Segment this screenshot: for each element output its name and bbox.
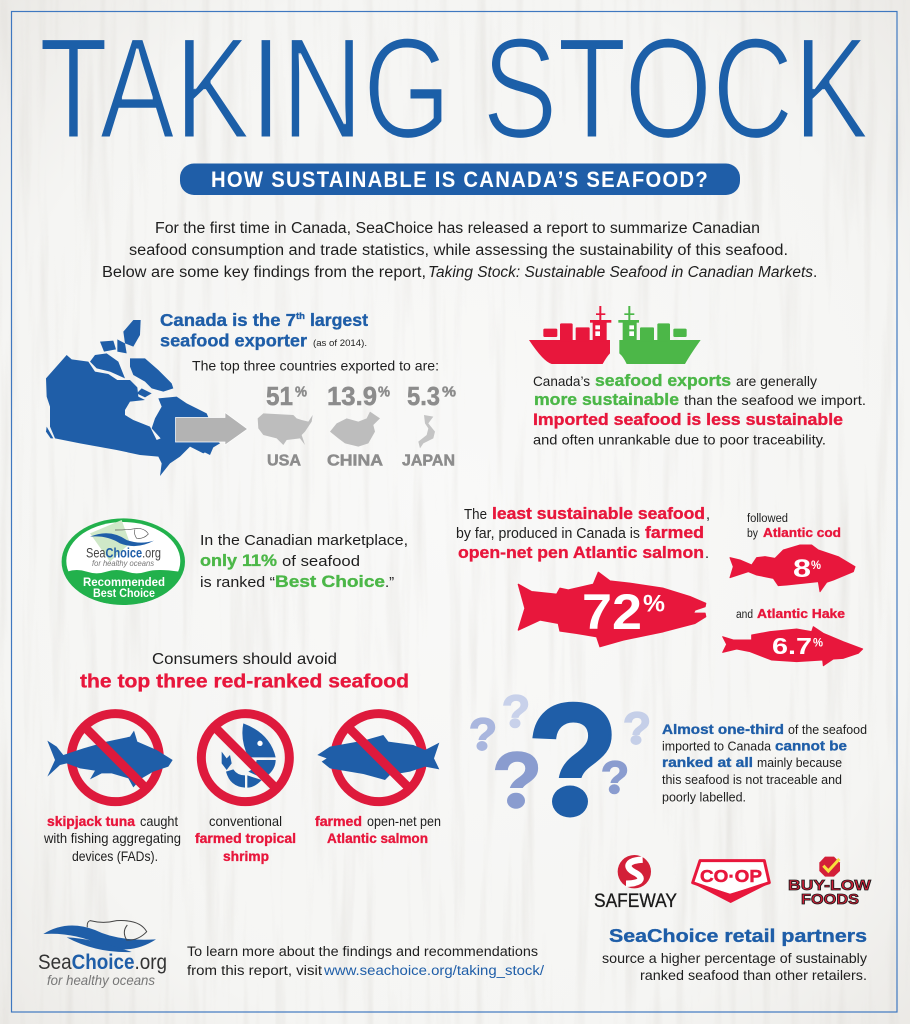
panel: avoid [43, 651, 441, 864]
stat: Japan [402, 381, 456, 470]
panel: ships [529, 306, 866, 448]
text: retail partners [602, 926, 867, 983]
intro text: For the first time in Canada, SeaChoice has released a report to summarize Canadian [155, 220, 760, 237]
text: one third [662, 721, 867, 804]
heading: exporter: largest [310, 310, 368, 330]
icon: question marks: ? [527, 670, 619, 849]
icon: no skipjack tuna [47, 714, 173, 802]
text: only 11%: of seafood [282, 553, 360, 570]
text: exports vs imports: Canada’s [533, 373, 590, 389]
icon: question marks: ? [623, 702, 651, 755]
panel: unrankable [470, 694, 866, 818]
text: followed by cod: Atlantic cod [763, 525, 841, 540]
icon: arrow [176, 412, 248, 445]
text: least sustainable: , [706, 507, 710, 523]
logo: SeaChoice: SeaChoice.org [38, 951, 167, 974]
heading: avoid: the top three red-ranked seafood [80, 672, 409, 692]
icon: cod 8% [730, 545, 855, 592]
text: only 11% [200, 532, 408, 591]
text: one third: this seafood is not traceable and [662, 773, 842, 787]
stat: Japan: 5.3 [407, 381, 440, 411]
icon: hake 6.7% [723, 627, 863, 666]
text: one third: cannot be [775, 738, 847, 754]
icon: no tropical shrimp [201, 714, 289, 802]
text: only 11%: is ranked “ [200, 574, 275, 591]
intro text: Below are some key findings from the report, [102, 264, 426, 281]
icon: no farmed salmon [317, 714, 439, 802]
intro text: Taking Stock: Sustainable Seafood in Canadian Markets [428, 264, 813, 281]
logo: Safeway: SAFEWAY [594, 891, 677, 912]
icon: hake 6.7%: 6.7 [772, 633, 812, 659]
icon: green ship [618, 306, 701, 364]
text: one third: mainly because [757, 756, 842, 770]
caption: tuna: with fishing aggregating [43, 830, 181, 846]
heading: exporter: seafood exporter [160, 330, 307, 350]
text: only 11%: .” [385, 574, 394, 591]
stat: China: % [378, 384, 390, 400]
icon: SeaChoice recommended label: for healthy oceans [92, 559, 154, 568]
text: exports vs imports: are generally [736, 373, 817, 389]
text: one third: poorly labelled. [662, 790, 746, 804]
text: one third: of the seafood [788, 723, 867, 737]
text: retail partners: ranked seafood than other retailers. [640, 967, 867, 983]
logo: Buy-Low Foods [788, 857, 872, 908]
text: only 11%: In the Canadian marketplace, [200, 532, 408, 549]
text: one third: imported to Canada [662, 740, 771, 754]
text: least sustainable: . [705, 546, 709, 562]
stat: China: CHINA [327, 452, 383, 470]
intro text [102, 220, 817, 281]
text: and hake: and [736, 609, 753, 621]
stat: China [327, 381, 390, 470]
text: least sustainable: least sustainable seafood [492, 505, 705, 523]
subtitle banner [180, 164, 740, 195]
stat: USA [258, 381, 313, 470]
text: exports vs imports: more sustainable [534, 391, 679, 409]
text: retail partners: source a higher percentage of sustainably [602, 950, 867, 966]
text: exports vs imports: than the seafood we import. [684, 392, 866, 408]
caption: tuna [43, 813, 181, 864]
icon: SeaChoice recommended label [62, 518, 185, 605]
text: least sustainable [456, 505, 710, 562]
text: one third: ranked at all [662, 754, 753, 770]
stat: Japan: JAPAN [402, 452, 455, 470]
caption: shrimp: farmed tropical [195, 830, 296, 846]
logo: Co-op [693, 861, 769, 902]
caption: salmon: farmed [315, 813, 362, 829]
panel: retail partners [594, 855, 872, 983]
icon: cod 8%: % [811, 558, 821, 572]
icon: question marks: ? [601, 751, 629, 804]
text: least sustainable: open-net pen Atlantic salmon [458, 544, 704, 562]
icon: SeaChoice recommended label: Best Choice [93, 588, 155, 600]
logo: SeaChoice: for healthy oceans [47, 972, 155, 988]
caption: salmon: open-net pen [367, 813, 441, 829]
text: followed by cod: followed [747, 513, 788, 525]
text: and hake: Atlantic Hake [757, 606, 845, 621]
caption: shrimp: conventional [209, 813, 282, 829]
stat: USA: USA [267, 452, 301, 470]
subtitle banner: HOW SUSTAINABLE IS CANADA’S SEAFOOD? [211, 168, 708, 192]
text: retail partners: SeaChoice retail partners [609, 926, 867, 946]
icon: Canada map [46, 320, 223, 476]
icon: salmon 72%: % [643, 590, 665, 618]
caption: salmon: Atlantic salmon [327, 830, 428, 846]
caption: tuna: devices (FADs). [72, 848, 158, 864]
icon: cod 8%: 8 [793, 555, 811, 583]
footer text: www.seachoice.org/taking_stock/ [323, 963, 544, 978]
text: only 11%: only 11% [200, 552, 277, 570]
icon: question marks: ? [469, 708, 497, 761]
panel: exporter [46, 310, 456, 476]
stat: Japan: % [442, 384, 456, 400]
text: least sustainable: farmed [645, 524, 704, 542]
text: exports vs imports [533, 372, 866, 448]
stat: USA: % [295, 384, 307, 400]
stat: China: 13.9 [327, 381, 377, 411]
icon: salmon 72% [518, 572, 706, 647]
icon: question marks: ? [502, 685, 530, 738]
logo: SeaChoice [38, 921, 167, 988]
logo: Buy-Low Foods: FOODS [801, 891, 859, 908]
caption: tuna: caught [140, 813, 178, 829]
heading: exporter: Canada is the 7 [160, 310, 296, 330]
icon: SeaChoice recommended label: SeaChoice.org [86, 544, 161, 560]
heading: avoid: Consumers should avoid [152, 651, 337, 668]
text: exports vs imports: seafood exports [595, 372, 731, 390]
text: followed by cod [747, 513, 841, 540]
icon: question marks [470, 694, 650, 818]
text: only 11%: Best Choice [275, 573, 385, 591]
icon: question marks: ? [492, 736, 542, 827]
logo: Co-op: CO·OP [700, 866, 762, 886]
logo: Buy-Low Foods: BUY-LOW [788, 877, 872, 894]
icon: salmon 72%: 72 [582, 584, 642, 640]
note: (as of 2014). [313, 338, 367, 348]
footer text: To learn more about the findings and recommendations [187, 944, 538, 959]
heading: exporter: th [296, 311, 305, 321]
heading: avoid [80, 651, 409, 692]
icon: red ship [529, 306, 611, 364]
text: least sustainable: by far, produced in Canada is [456, 526, 640, 542]
text: followed by cod: by [747, 528, 758, 540]
text: top three: The top three countries exported to are: [192, 358, 439, 374]
panel: least sustainable [456, 505, 863, 666]
heading: exporter [160, 310, 368, 350]
footer text [187, 944, 544, 978]
icon: SeaChoice recommended label: Recommended [83, 577, 165, 589]
text: least sustainable: The [464, 507, 487, 523]
caption: tuna: skipjack tuna [47, 813, 135, 829]
caption: shrimp: shrimp [223, 848, 269, 864]
caption: salmon [315, 813, 441, 846]
stat: USA: 51 [266, 381, 293, 411]
intro text: seafood consumption and trade statistics, while assessing the sustainability of this seafood. [129, 242, 788, 259]
text: one third: Almost one-third [662, 721, 784, 737]
caption: shrimp [195, 813, 296, 864]
text: exports vs imports: Imported seafood is less sustainable [533, 411, 843, 429]
panel: best choice [62, 518, 408, 605]
footer text: from this report, visit [187, 963, 322, 978]
intro text: . [813, 264, 817, 281]
logo: Safeway [594, 855, 677, 912]
text: exports vs imports: and often unrankable due to poor traceability. [533, 432, 826, 448]
icon: hake 6.7%: % [813, 636, 823, 650]
